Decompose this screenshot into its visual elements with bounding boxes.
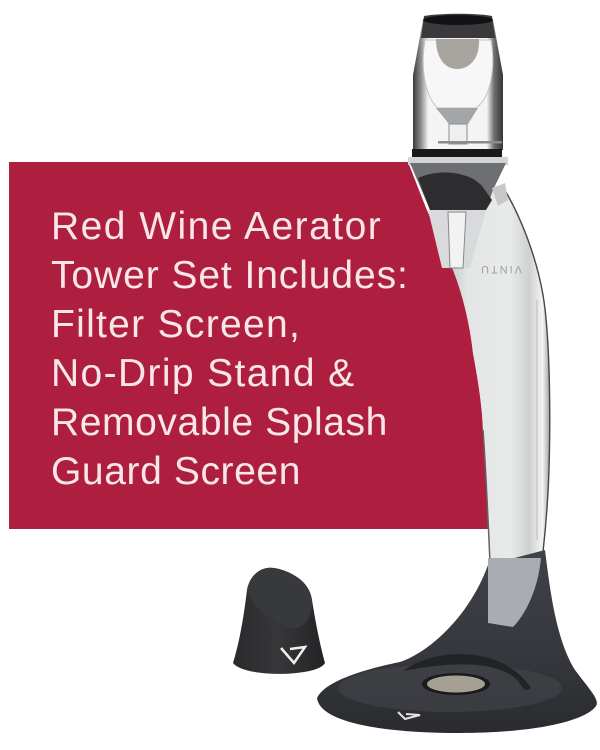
heading text (51, 205, 409, 493)
no-drip stand (317, 550, 597, 733)
tower tube: VINTU (479, 263, 522, 275)
heading text: Tower Set Includes: (51, 254, 409, 297)
panel: red background (9, 162, 488, 529)
heading text: No-Drip Stand & (51, 352, 356, 395)
heading text: Removable Splash (51, 401, 388, 444)
heading text: Filter Screen, (51, 303, 301, 346)
icon: logo on guard (281, 647, 305, 663)
tower tube (447, 187, 550, 565)
heading text: Guard Screen (51, 450, 301, 493)
splash guard screen (233, 568, 325, 674)
icon: logo on stand (398, 712, 420, 719)
filter screen (422, 673, 490, 695)
aerator head (408, 14, 508, 268)
heading text: Red Wine Aerator (51, 205, 382, 248)
